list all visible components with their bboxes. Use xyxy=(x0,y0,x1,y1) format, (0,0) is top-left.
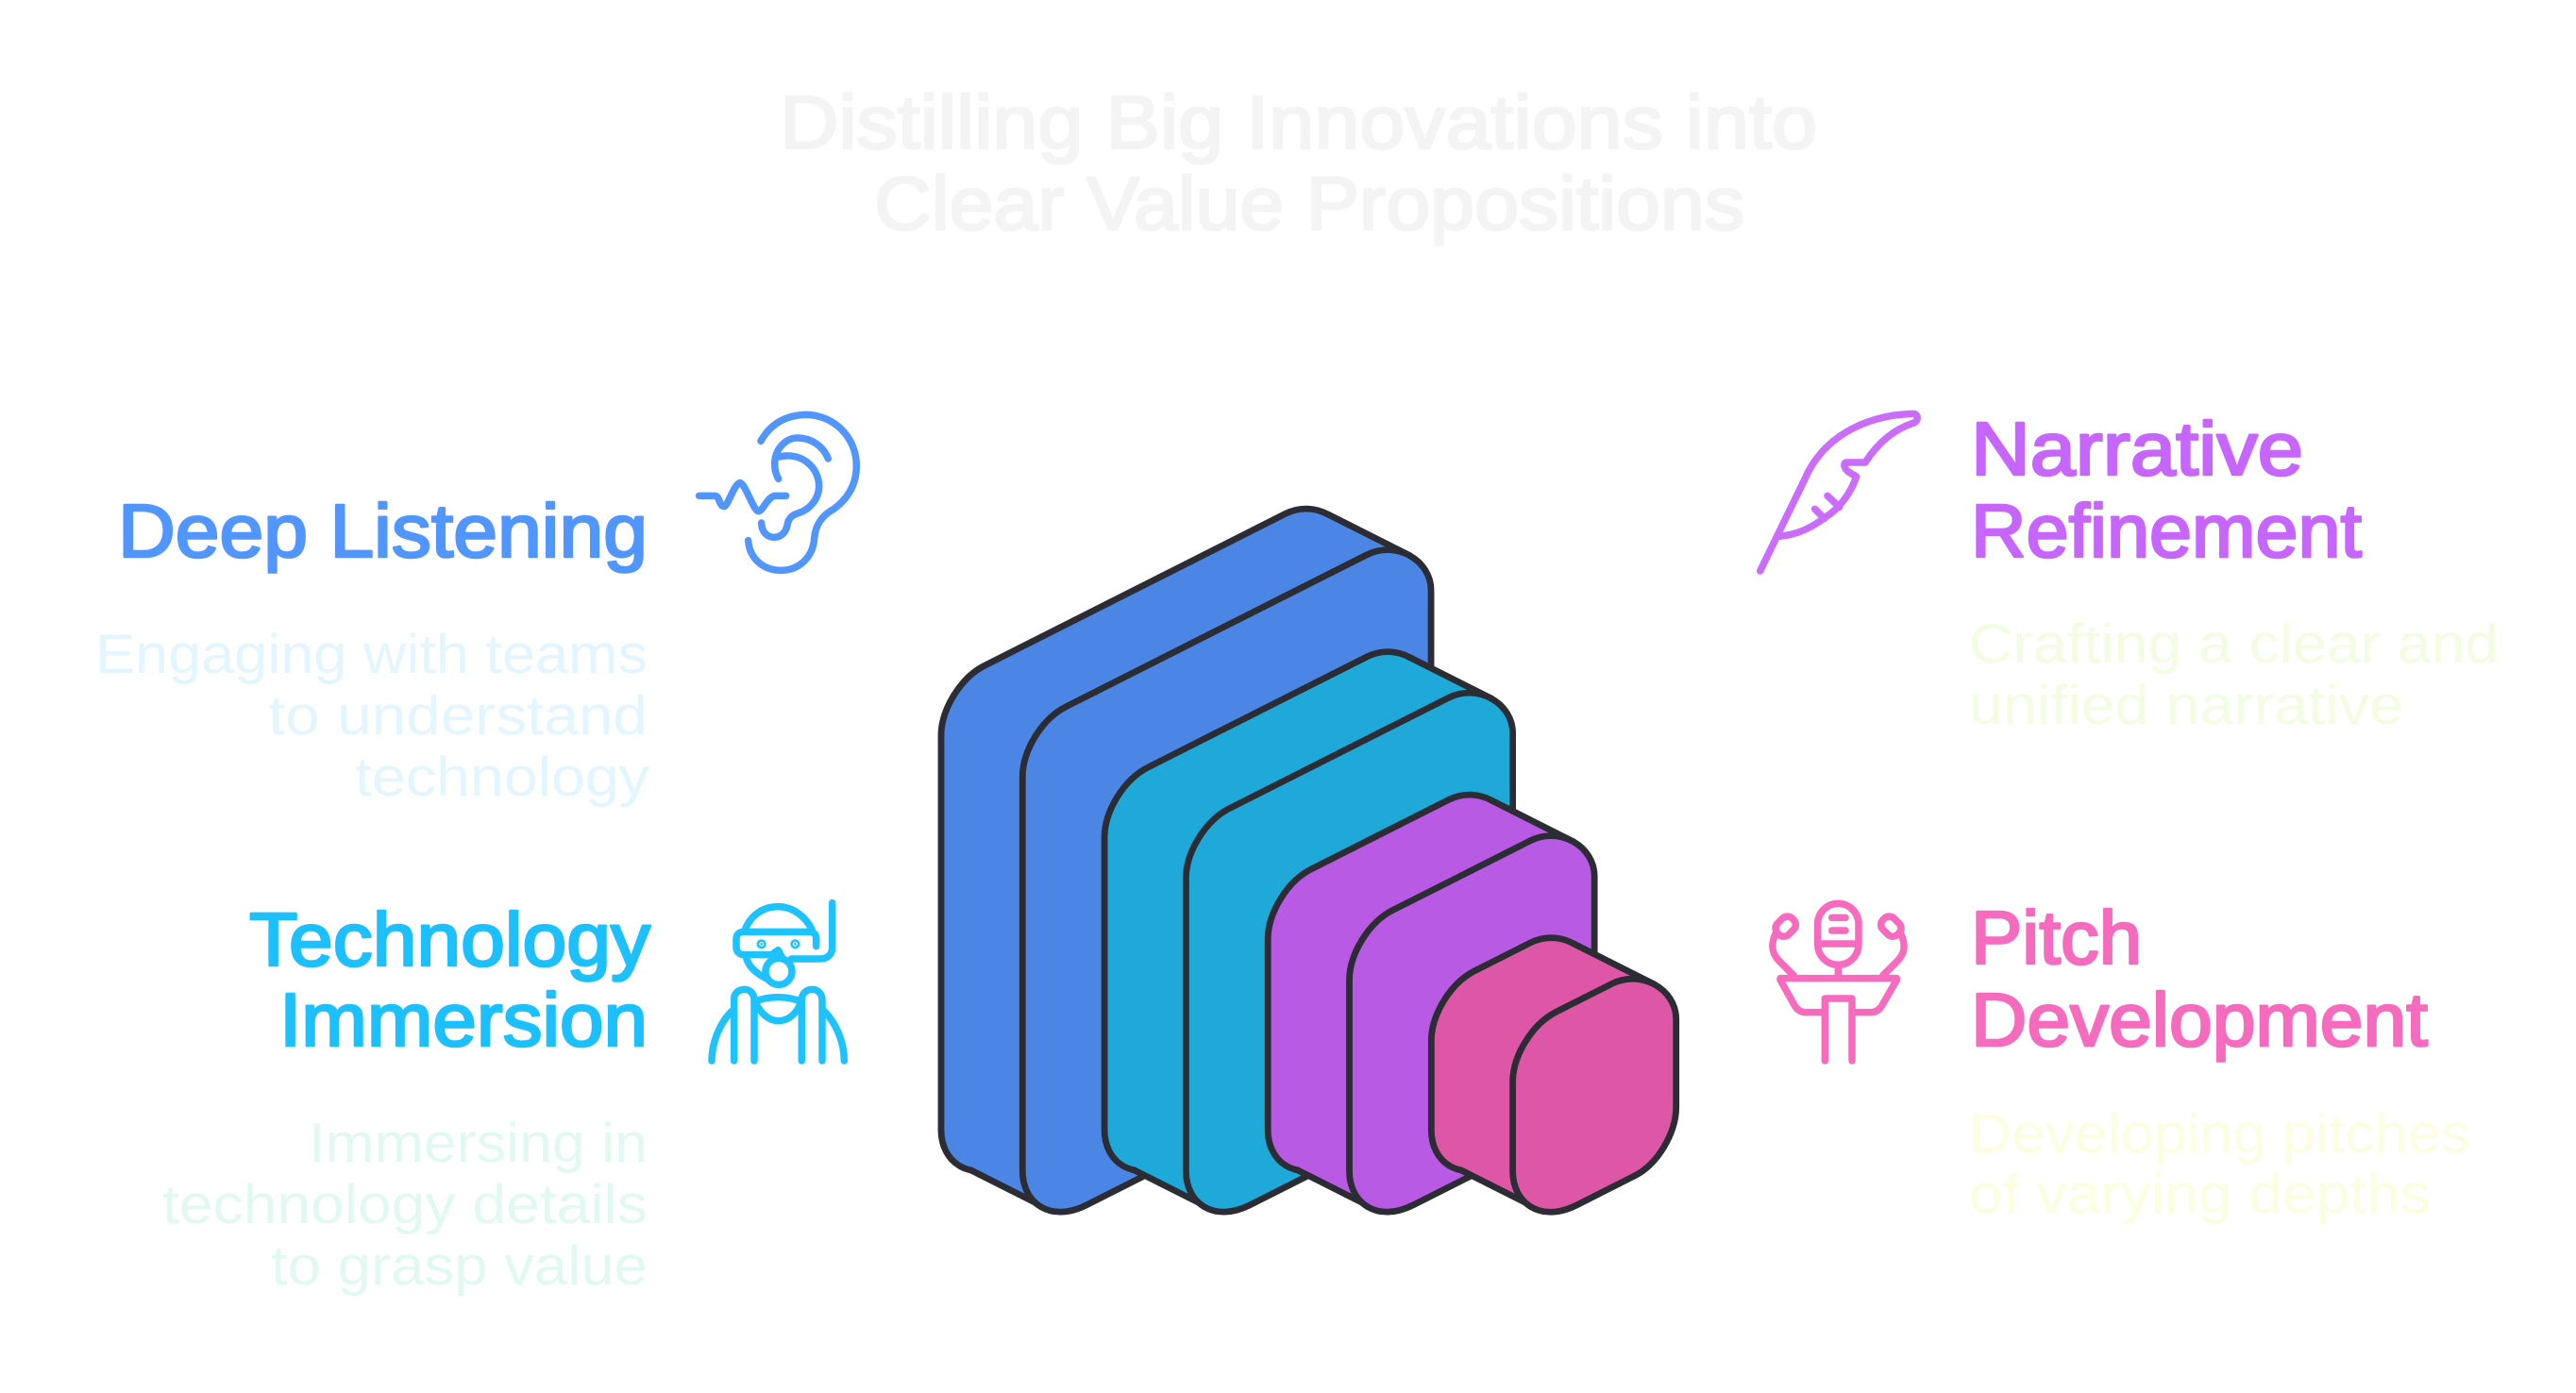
heading: Technology Immersion: Immersion xyxy=(279,978,648,1062)
stacked isometric blocks chart xyxy=(941,509,1676,1212)
panel: Narrative Refinement xyxy=(1969,407,2499,736)
icon: diver with snorkel xyxy=(712,903,844,1061)
description: Technology Immersion: Immersing in xyxy=(309,1113,648,1174)
icon: podium with microphones xyxy=(1773,903,1904,1061)
description: Deep Listening: technology xyxy=(355,747,649,808)
description: Pitch Development xyxy=(1969,1103,2470,1225)
heading: Technology Immersion xyxy=(249,898,650,1062)
description: Technology Immersion xyxy=(162,1113,648,1297)
block: purple xyxy=(1268,795,1594,1212)
description: Narrative Refinement xyxy=(1969,613,2499,736)
title: Clear Value Propositions xyxy=(874,161,1744,245)
description: Pitch Development: Developing pitches xyxy=(1969,1103,2470,1165)
icon: feather quill xyxy=(1760,413,1917,571)
heading: Technology Immersion: Technology xyxy=(249,898,650,982)
panel: Technology Immersion xyxy=(162,898,650,1297)
title xyxy=(780,80,1817,245)
heading: Narrative Refinement: Narrative xyxy=(1971,407,2303,491)
heading: Narrative Refinement xyxy=(1971,407,2362,573)
description: Deep Listening: to understand xyxy=(268,685,648,747)
description: Narrative Refinement: Crafting a clear and xyxy=(1969,613,2499,675)
block: teal xyxy=(1104,652,1513,1212)
heading: Deep Listening: Deep Listening xyxy=(118,489,648,573)
description: Technology Immersion: technology details xyxy=(162,1174,648,1235)
description: Deep Listening xyxy=(95,624,649,808)
description: Deep Listening: Engaging with teams xyxy=(95,624,648,685)
icon: ear with sound wave xyxy=(699,414,856,570)
description: Pitch Development: of varying depths xyxy=(1969,1164,2431,1225)
heading: Narrative Refinement: Refinement xyxy=(1971,489,2362,573)
block: pink xyxy=(1431,938,1676,1212)
heading: Pitch Development xyxy=(1971,896,2428,1062)
description: Technology Immersion: to grasp value xyxy=(271,1235,648,1297)
panel: Deep Listening xyxy=(95,489,649,808)
title: Distilling Big Innovations into xyxy=(780,80,1817,164)
block: blue xyxy=(941,509,1431,1212)
heading: Pitch Development: Pitch xyxy=(1971,896,2142,980)
description: Narrative Refinement: unified narrative xyxy=(1969,675,2403,736)
heading: Pitch Development: Development xyxy=(1971,978,2428,1062)
panel: Pitch Development xyxy=(1969,896,2470,1225)
